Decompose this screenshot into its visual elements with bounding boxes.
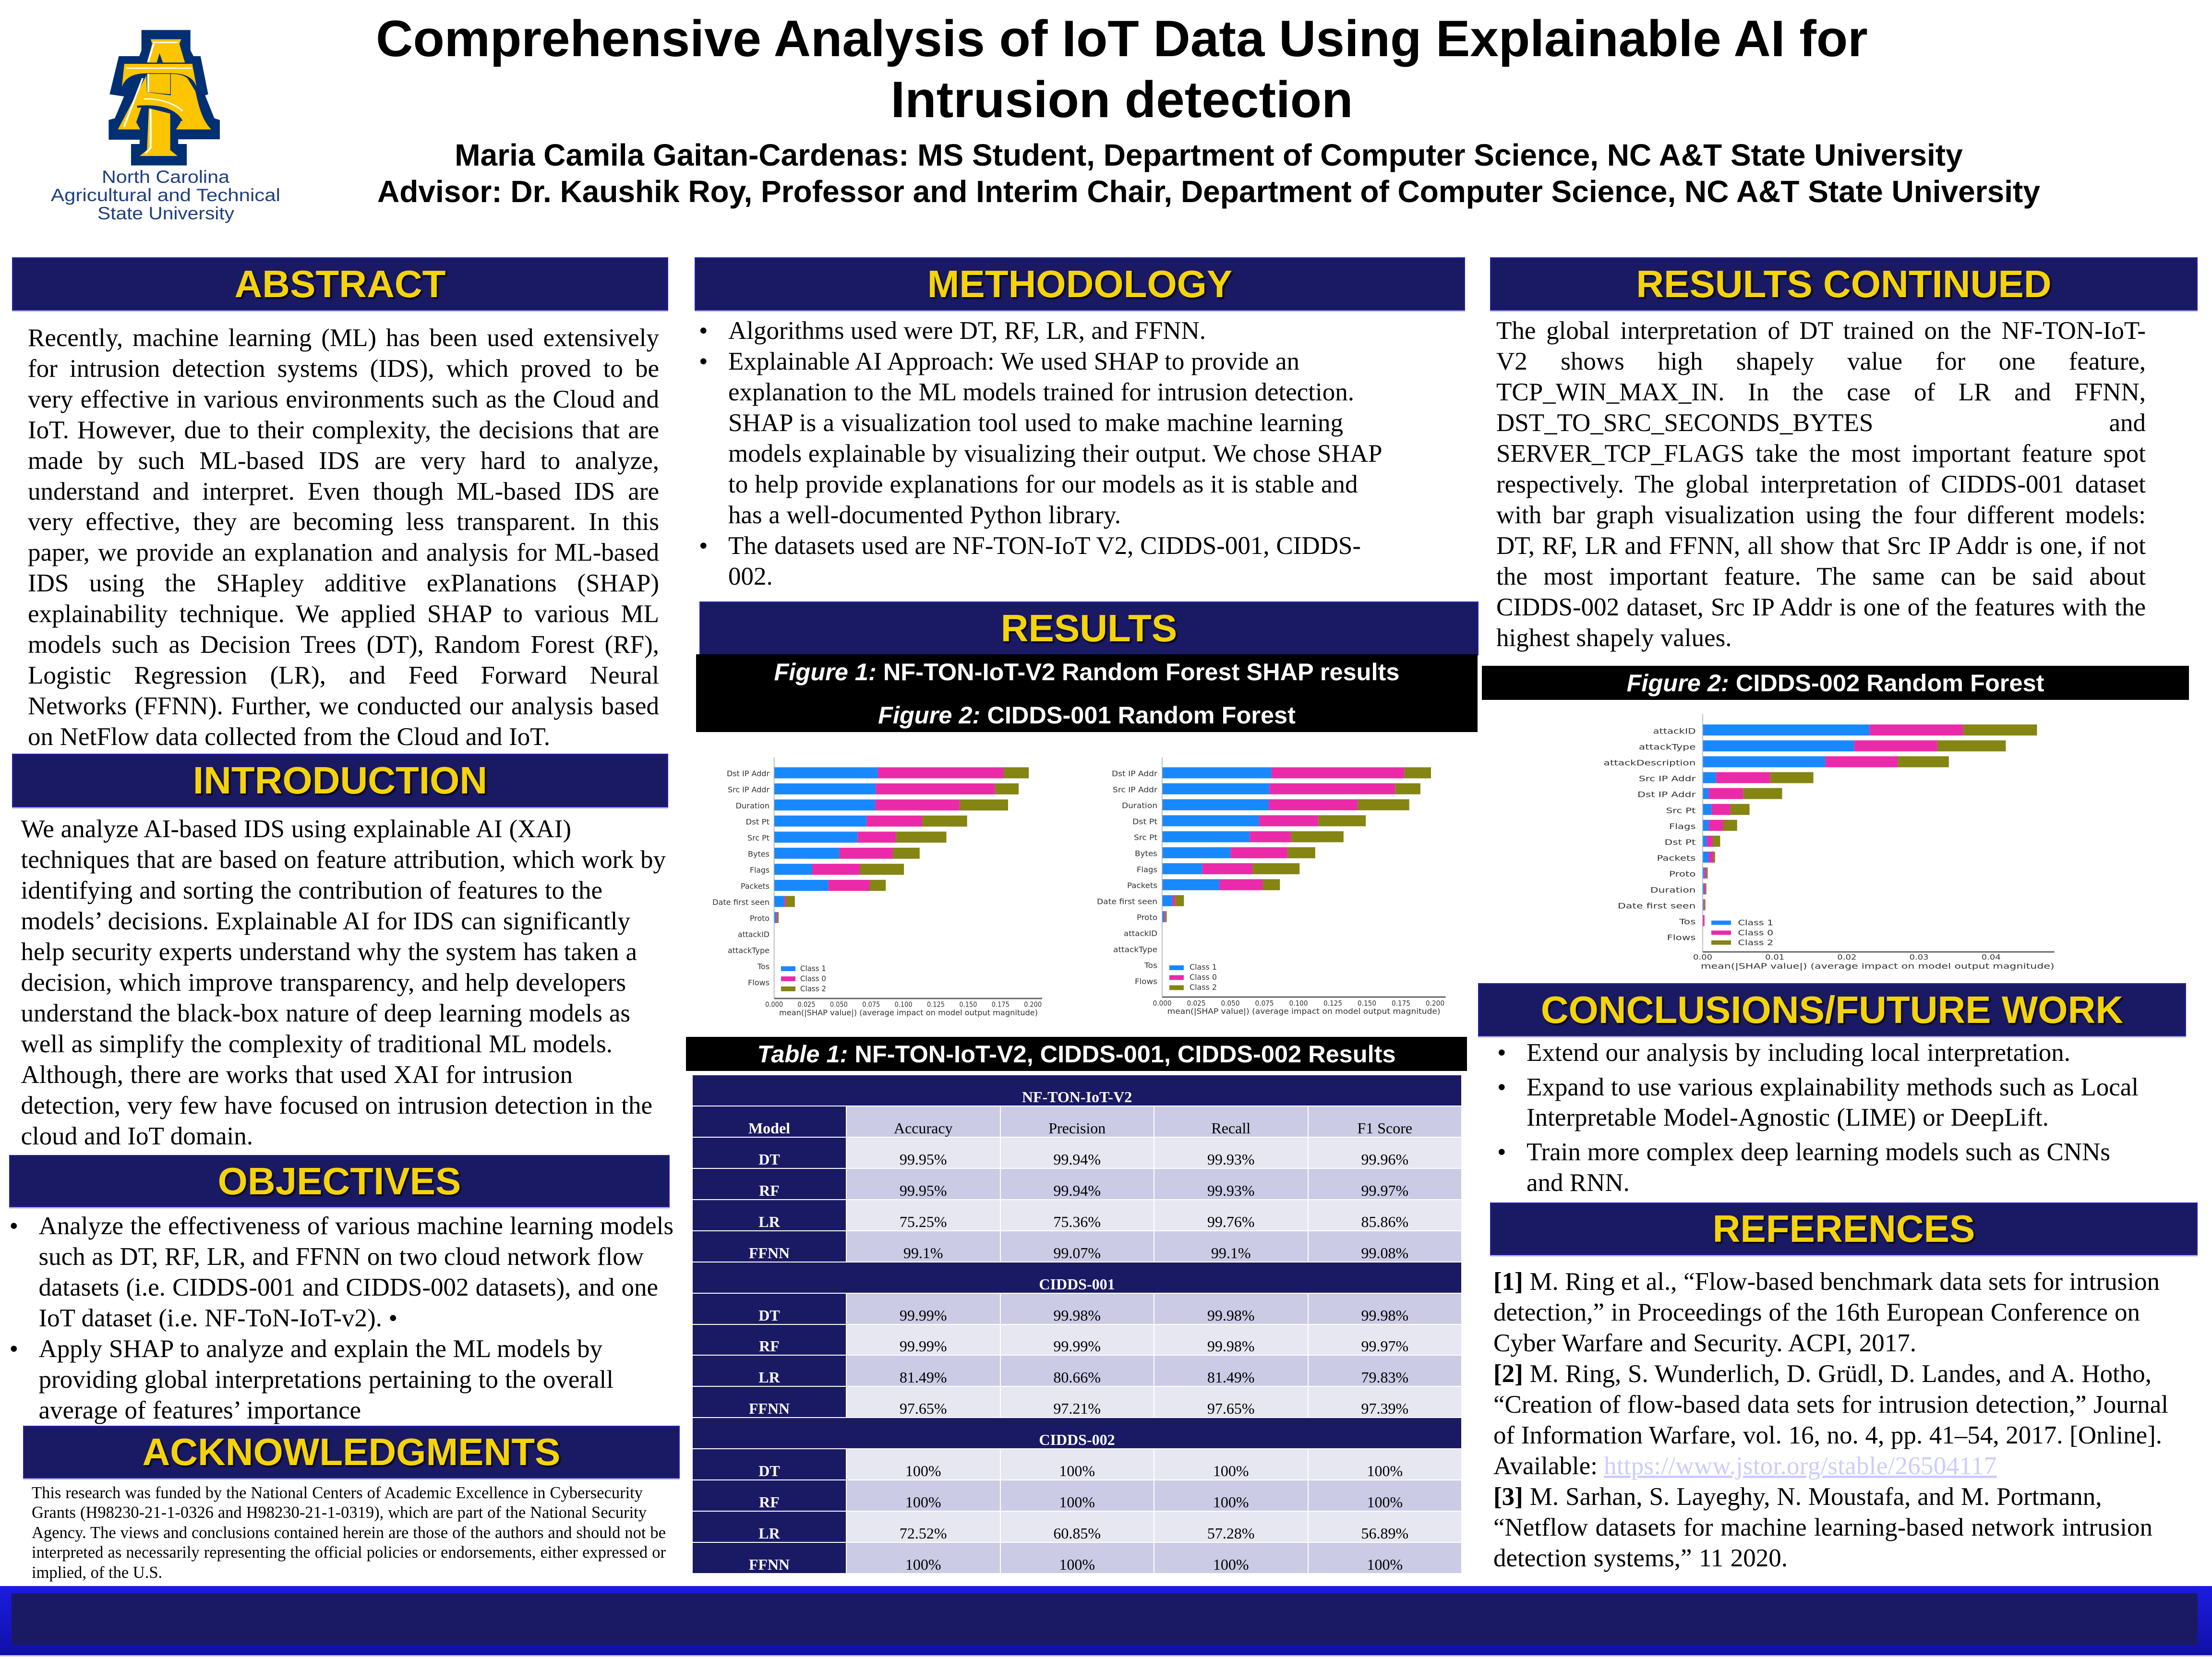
text: results continued: V2 shows high shapely value for one feature,: [1496, 348, 2146, 375]
text: methodology bullets: [699, 317, 1382, 590]
tick labels: 0.050: [1221, 999, 1239, 1008]
feature labels: Dst IP Addr: [727, 769, 769, 778]
heading: results continued: [1490, 257, 2198, 311]
table: model results: 100%: [1213, 1493, 1249, 1511]
feature labels: Bytes: [748, 850, 769, 858]
feature labels: Flags: [1669, 822, 1695, 831]
table: model results: 99.96%: [1361, 1151, 1408, 1168]
chart: figure 1 SHAP bar chart: [712, 757, 1042, 1017]
table: model results: 99.97%: [1361, 1182, 1408, 1199]
text: results continued: DST_TO_SRC_SECONDS_BYTES and: [1496, 409, 2146, 437]
tick labels: 0.200: [1426, 999, 1444, 1008]
table: model results: 100%: [905, 1493, 941, 1511]
tick labels: 0.025: [798, 1000, 815, 1009]
text: abstract: Logistic Regression (LR), and Feed Forward Neural: [28, 661, 659, 689]
table: model results: DT: [758, 1462, 780, 1479]
heading: abstract: ABSTRACT: [235, 263, 445, 305]
text: objectives bullets: datasets (i.e. CIDDS-001 and CIDDS-002 datasets), and one: [38, 1274, 658, 1301]
feature labels: attackID: [1124, 929, 1157, 938]
legend: Class 0: [1190, 973, 1217, 982]
table: model results: 100%: [1059, 1493, 1095, 1511]
text: •: [699, 317, 708, 345]
table: model results: DT: [758, 1151, 780, 1168]
footer inner panel: [12, 1593, 2198, 1645]
legend: Class 2: [800, 984, 826, 993]
text: references: Available: https://www.jstor.org/stable/26504117: [1493, 1452, 1997, 1480]
legend: Class 1: [1738, 918, 1773, 927]
caption bar: figures 1 and 2: Figure 2: CIDDS-001 Random Forest: [878, 701, 1296, 729]
bars: [774, 767, 1029, 923]
table: model results: 60.85%: [1053, 1525, 1101, 1542]
table: model results: RF: [759, 1337, 780, 1355]
text: abstract: models such as Decision Trees (DT), Random Forest (RF),: [28, 631, 659, 659]
icon: Aggie AT emblem: [108, 30, 220, 166]
feature labels: Src IP Addr: [1113, 785, 1157, 794]
text: methodology bullets: explanation to the ML models trained for intrusion detection.: [728, 378, 1354, 406]
table: model results: 81.49%: [900, 1369, 947, 1386]
feature labels: Src Pt: [1666, 806, 1695, 815]
feature labels: Packets: [1127, 881, 1157, 890]
table: model results: Accuracy: [894, 1119, 953, 1137]
text: references: detection,” in Proceedings of the 16th European Conference on: [1493, 1298, 2140, 1326]
table: model results: FFNN: [749, 1400, 790, 1417]
text: abstract: understand and interpret. Even though ML-based IDS are: [28, 478, 659, 505]
table: model results: 97.39%: [1361, 1400, 1408, 1417]
feature labels: Flags: [1137, 865, 1157, 874]
text: methodology bullets: 002.: [728, 563, 773, 590]
tick labels: 0.075: [862, 1000, 880, 1009]
text: conclusions bullets: •: [1497, 1039, 1506, 1067]
text: introduction: identifying and sorting the contribution of features to the: [21, 877, 602, 904]
feature labels: Src Pt: [747, 833, 769, 842]
text: objectives bullets: Analyze the effectiveness of various machine learning models: [38, 1212, 673, 1240]
feature labels: Tos: [1144, 961, 1157, 970]
text: conclusions bullets: Interpretable Model-Agnostic (LIME) or DeepLift.: [1527, 1104, 2049, 1131]
text: abstract: Recently, machine learning (ML) has been used extensively: [28, 324, 659, 352]
table: model results: LR: [758, 1369, 780, 1386]
legend: [781, 964, 826, 993]
logo wordmark: North Carolina: [102, 167, 229, 187]
text: introduction: Although, there are works that used XAI for intrusion: [21, 1061, 573, 1089]
table: model results: 99.98%: [1361, 1307, 1408, 1324]
feature labels: Tos: [1679, 917, 1695, 926]
text: introduction: cloud and IoT domain.: [21, 1122, 253, 1150]
feature labels: [1097, 769, 1157, 986]
heading: results continued: RESULTS CONTINUED: [1636, 263, 2052, 305]
text: introduction: understand the black-box nature of deep learning models as: [21, 999, 630, 1027]
text: results continued: the most important feature. The same can be said about: [1496, 563, 2146, 590]
text: objectives bullets: [10, 1212, 673, 1424]
tick labels: 0.000: [1153, 999, 1171, 1008]
text: references: [1] M. Ring et al., “Flow-based benchmark data sets for intrusion: [1493, 1268, 2160, 1296]
text: abstract: IoT. However, due to their complexity, the decisions that are: [28, 416, 659, 444]
legend: [1169, 962, 1217, 992]
text: abstract: Networks (FFNN). Further, we conducted our analysis based: [28, 692, 659, 720]
text: objectives bullets: average of features’ importance: [38, 1396, 361, 1424]
tick labels: [1153, 999, 1444, 1008]
text: conclusions bullets: Extend our analysis by including local interpretation.: [1527, 1039, 2070, 1067]
logo wordmark: Agricultural and Technical: [51, 185, 280, 205]
tick labels: 0.025: [1187, 999, 1206, 1008]
text: results continued: highest shapely values.: [1496, 624, 1732, 652]
axes: [1162, 757, 1163, 997]
text: results continued: DT, RF, LR and FFNN, all show that Src IP Addr is one, if not: [1496, 532, 2146, 560]
feature labels: Bytes: [1135, 849, 1157, 858]
table: model results: 99.94%: [1053, 1151, 1101, 1168]
tick labels: 0.175: [992, 1000, 1010, 1009]
table: model results: Recall: [1211, 1119, 1250, 1137]
table: model results: LR: [758, 1525, 780, 1542]
caption bar: figure 2 CIDDS-002: [1482, 665, 2189, 700]
text: abstract: made by such ML-based IDS are very hard to analyze,: [28, 447, 659, 475]
text: conclusions bullets: Train more complex deep learning models such as CNNs: [1527, 1138, 2110, 1166]
table: model results: 97.65%: [1207, 1400, 1255, 1417]
table: model results: 100%: [1367, 1462, 1403, 1479]
heading: objectives: OBJECTIVES: [218, 1160, 461, 1202]
legend: Class 1: [1190, 962, 1217, 972]
legend: Class 0: [800, 974, 826, 983]
text: references: detection systems,” 11 2020.: [1493, 1544, 1788, 1572]
text: abstract: very effective, they are becoming less transparent. In this: [28, 508, 659, 536]
feature labels: Packets: [741, 881, 769, 891]
tick labels: 0.00: [1693, 953, 1712, 962]
text: introduction: We analyze AI-based IDS using explainable AI (XAI): [21, 815, 571, 843]
table: model results: 75.25%: [900, 1213, 947, 1230]
feature labels: Dst IP Addr: [1112, 769, 1157, 778]
text: methodology bullets: has a well-documented Python library.: [728, 501, 1121, 529]
text: references: “Creation of flow-based data sets for intrusion detection,” Journal: [1493, 1391, 2168, 1419]
tick labels: 0.100: [895, 1000, 913, 1009]
caption bar: figures 1 and 2: Figure 1: NF-TON-IoT-V2 Random Forest SHAP results: [774, 658, 1399, 685]
text: results continued: TCP_WIN_MAX_IN. In the case of LR and FFNN,: [1496, 378, 2146, 406]
legend: Class 1: [800, 964, 826, 973]
table: model results: 99.1%: [1211, 1244, 1251, 1262]
legend: Class 2: [1190, 983, 1217, 992]
feature labels: [712, 769, 769, 987]
text: introduction: detection, very few have focused on intrusion detection in the: [21, 1092, 652, 1119]
tick labels: [1693, 953, 2001, 962]
text: introduction: models’ decisions. Explainable AI for IDS can significantly: [21, 907, 630, 935]
caption bar: figures 1 and 2: [696, 654, 1478, 732]
text: references: [2] M. Ring, S. Wunderlich, D. Grüdl, D. Landes, and A. Hotho,: [1493, 1360, 2152, 1388]
text: references: “Netflow datasets for machine learning-based network intrusion: [1493, 1514, 2152, 1541]
table: model results: 99.99%: [1053, 1337, 1101, 1355]
text: acknowledgments: interpreted as necessarily representing the official policies or endorsements, either expressed or: [32, 1543, 666, 1562]
text: acknowledgments: This research was funded by the National Centers of Academic Excellence in Cybersecurity: [32, 1484, 643, 1502]
feature labels: Dst Pt: [1132, 817, 1157, 826]
heading: methodology: [695, 257, 1465, 311]
tick labels: 0.04: [1982, 953, 2001, 962]
tick labels: 0.150: [1358, 999, 1376, 1008]
table: model results: 99.94%: [1053, 1182, 1101, 1199]
text: references: Cyber Warfare and Security. ACPI, 2017.: [1493, 1329, 1916, 1357]
feature labels: Flags: [750, 866, 769, 875]
axes: [1702, 714, 1703, 952]
tick labels: 0.150: [959, 1000, 977, 1009]
legend: Class 2: [1738, 938, 1773, 947]
feature labels: Proto: [750, 914, 769, 923]
bars: [1703, 724, 2037, 926]
feature labels: Dst Pt: [746, 817, 769, 827]
table: model results: 99.98%: [1207, 1307, 1255, 1324]
table: model results: 99.1%: [903, 1244, 943, 1262]
feature labels: [1603, 726, 1696, 942]
heading: results: RESULTS: [1001, 607, 1177, 649]
heading: abstract: [12, 257, 668, 311]
heading: references: REFERENCES: [1713, 1207, 1975, 1250]
table: model results: 99.99%: [900, 1307, 947, 1324]
heading: methodology: METHODOLOGY: [927, 263, 1232, 305]
table: model results: FFNN: [749, 1244, 790, 1262]
authors: [377, 138, 2040, 209]
table: model results: LR: [758, 1213, 780, 1230]
title: Intrusion detection: [891, 71, 1353, 128]
chart: figure 2 SHAP bar chart: [1097, 757, 1446, 1016]
tick labels: 0.01: [1765, 953, 1784, 962]
tick labels: 0.02: [1837, 953, 1856, 962]
heading: conclusions/future work: [1478, 983, 2186, 1036]
text: methodology bullets: The datasets used are NF-TON-IoT V2, CIDDS-001, CIDDS-: [728, 532, 1361, 560]
text: •: [10, 1335, 18, 1363]
table: model results: [693, 1075, 1461, 1573]
tick labels: [765, 1000, 1042, 1009]
tick labels: 0.000: [765, 1000, 783, 1009]
axis title: mean(|SHAP value|) (average impact on model output magnitude): [1167, 1007, 1441, 1016]
table: model results: Model: [748, 1119, 790, 1137]
feature labels: Flows: [1667, 933, 1695, 942]
feature labels: Duration: [1650, 885, 1695, 894]
caption bar: figure 2 CIDDS-002: Figure 2: CIDDS-002 Random Forest: [1627, 669, 2044, 696]
heading: conclusions/future work: CONCLUSIONS/FUTURE WORK: [1541, 988, 2123, 1031]
feature labels: Packets: [1657, 854, 1695, 863]
text: abstract: [28, 324, 659, 751]
text: methodology bullets: models explainable by visualizing their output. We chose SHAP: [728, 440, 1382, 468]
table: model results: 99.98%: [1053, 1307, 1101, 1324]
text: conclusions bullets: Expand to use various explainability methods such as Local: [1527, 1073, 2139, 1101]
table: model results: 99.99%: [900, 1337, 947, 1355]
title: [376, 10, 1868, 128]
text: results continued: SERVER_TCP_FLAGS take the most important feature spot: [1496, 440, 2146, 468]
feature labels: attackID: [738, 930, 769, 939]
table: model results: 99.97%: [1361, 1337, 1408, 1355]
table: model results: RF: [759, 1182, 780, 1199]
text: •: [10, 1212, 18, 1240]
text: results continued: The global interpretation of DT trained on the NF-TON-IoT-: [1496, 317, 2146, 345]
feature labels: Date first seen: [1618, 901, 1695, 910]
logo: North Carolina A&T State University: [51, 30, 280, 223]
table: model results: CIDDS-002: [1039, 1431, 1115, 1448]
feature labels: attackType: [1113, 945, 1157, 954]
text: methodology bullets: Explainable AI Approach: We used SHAP to provide an: [728, 348, 1299, 375]
heading: results: [699, 601, 1479, 655]
caption bar: table 1: Table 1: NF-TON-IoT-V2, CIDDS-001, CIDDS-002 Results: [757, 1040, 1396, 1068]
text: references: of Information Warfare, vol. 16, no. 4, pp. 41–54, 2017. [Online].: [1493, 1421, 2162, 1449]
tick labels: 0.075: [1255, 999, 1274, 1008]
table: model results: 100%: [905, 1556, 941, 1573]
heading: introduction: INTRODUCTION: [193, 759, 487, 802]
table: model results: 75.36%: [1053, 1213, 1101, 1230]
feature labels: Flows: [748, 978, 769, 987]
text: results continued: with bar graph visualization using the four different models:: [1496, 501, 2146, 529]
table: model results: 97.21%: [1053, 1400, 1101, 1417]
table: model results: DT: [758, 1307, 780, 1324]
tick labels: 0.175: [1392, 999, 1410, 1008]
table: model results: RF: [759, 1493, 780, 1511]
table: model results: 57.28%: [1207, 1525, 1255, 1542]
table: model results: 81.49%: [1207, 1369, 1255, 1386]
authors: Advisor: Dr. Kaushik Roy, Professor and Interim Chair, Department of Computer Science, NC A&T State University: [377, 174, 2040, 209]
feature labels: attackID: [1653, 726, 1695, 735]
tick labels: 0.03: [1910, 953, 1929, 962]
table: model results: FFNN: [749, 1556, 790, 1573]
text: results continued: [1496, 317, 2146, 652]
text: references: [1493, 1268, 2168, 1572]
title: Comprehensive Analysis of IoT Data Using Explainable AI for: [376, 10, 1868, 67]
table: model results: 100%: [1213, 1462, 1249, 1479]
text: results continued: respectively. The global interpretation of CIDDS-001 dataset: [1496, 470, 2146, 498]
table: model results: F1 Score: [1357, 1119, 1412, 1137]
text: methodology bullets: SHAP is a visualization tool used to make machine learning: [728, 409, 1343, 437]
feature labels: attackType: [728, 946, 769, 955]
text: introduction: well as simplify the complexity of traditional ML models.: [21, 1030, 613, 1058]
feature labels: attackType: [1639, 742, 1695, 751]
table: model results: 100%: [905, 1462, 941, 1479]
text: abstract: paper, we provide an explanation and analysis for ML-based: [28, 539, 659, 566]
text: acknowledgments: [32, 1484, 666, 1582]
footer band: [0, 1586, 2212, 1655]
text: results continued: CIDDS-002 dataset, Src IP Addr is one of the features with the: [1496, 593, 2146, 621]
tick labels: 0.050: [830, 1000, 848, 1009]
feature labels: Date first seen: [712, 898, 769, 907]
text: •: [699, 348, 708, 375]
text: introduction: decision, which improve transparency, and help developers: [21, 969, 626, 997]
text: introduction: techniques that are based on feature attribution, which work by: [21, 846, 666, 874]
table: model results: 100%: [1367, 1493, 1403, 1511]
text: acknowledgments: Agency. The views and conclusions contained herein are those of the authors and should not be: [32, 1524, 666, 1542]
table: model results: CIDDS-001: [1039, 1275, 1115, 1293]
caption bar: table 1: [686, 1037, 1467, 1071]
heading: acknowledgments: ACKNOWLEDGMENTS: [142, 1431, 561, 1473]
table: model results: NF-TON-IoT-V2: [1022, 1088, 1132, 1106]
tick labels: 0.100: [1289, 999, 1308, 1008]
feature labels: Src IP Addr: [728, 785, 769, 794]
text: abstract: explainability technique. We applied SHAP to various ML: [28, 600, 659, 628]
feature labels: Duration: [1122, 801, 1157, 810]
text: conclusions bullets: •: [1497, 1073, 1506, 1101]
axis title: mean(|SHAP value|) (average impact on model output magnitude): [1701, 962, 2055, 971]
tick labels: 0.125: [927, 1000, 945, 1009]
feature labels: attackDescription: [1603, 758, 1695, 767]
text: abstract: very effective in various environments such as the Cloud and: [28, 385, 659, 413]
table: model results: 85.86%: [1361, 1213, 1408, 1230]
axis title: mean(|SHAP value|) (average impact on model output magnitude): [779, 1008, 1038, 1017]
text: conclusions bullets: and RNN.: [1527, 1168, 1630, 1196]
table: model results: 99.93%: [1207, 1151, 1255, 1168]
table: model results: 99.76%: [1207, 1213, 1255, 1230]
text: abstract: on NetFlow data collected from the Cloud and IoT.: [28, 723, 550, 751]
chart: CIDDS-002 SHAP bar chart: [1603, 714, 2055, 971]
feature labels: Proto: [1669, 869, 1695, 878]
heading: acknowledgments: [23, 1426, 680, 1479]
axes: [774, 757, 775, 998]
table: model results: 99.95%: [900, 1151, 947, 1168]
heading: objectives: [9, 1155, 670, 1207]
text: abstract: IDS using the SHapley additive exPlanations (SHAP): [28, 569, 659, 597]
text: conclusions bullets: •: [1497, 1138, 1506, 1166]
feature labels: Dst IP Addr: [1637, 790, 1696, 799]
legend: [1711, 918, 1773, 947]
legend: Class 0: [1738, 928, 1773, 937]
table: model results: 99.07%: [1053, 1244, 1101, 1262]
text: introduction: [21, 815, 666, 1150]
text: acknowledgments: implied, of the U.S.: [32, 1563, 162, 1582]
table: model results: 100%: [1213, 1556, 1249, 1573]
text: conclusions bullets: [1497, 1039, 2139, 1196]
table: model results: 100%: [1059, 1462, 1095, 1479]
text: objectives bullets: IoT dataset (i.e. NF-ToN-IoT-v2). •: [38, 1304, 397, 1332]
table: model results: 99.08%: [1361, 1244, 1408, 1262]
text: methodology bullets: Algorithms used were DT, RF, LR, and FFNN.: [728, 317, 1206, 345]
text: objectives bullets: providing global interpretations pertaining to the overall: [38, 1366, 613, 1394]
bars: [1162, 767, 1431, 922]
feature labels: Date first seen: [1097, 897, 1157, 906]
feature labels: Src Pt: [1134, 833, 1157, 842]
logo wordmark: State University: [97, 204, 235, 223]
table: model results: 72.52%: [900, 1525, 947, 1542]
table: model results: 56.89%: [1361, 1525, 1408, 1542]
text: •: [699, 532, 708, 560]
feature labels: Proto: [1137, 913, 1157, 922]
table: model results: 80.66%: [1053, 1369, 1101, 1386]
feature labels: Src IP Addr: [1639, 774, 1696, 783]
table: model results: 99.95%: [900, 1182, 947, 1199]
text: methodology bullets: to help provide explanations for our models as it is stable and: [728, 470, 1358, 498]
text: references: [3] M. Sarhan, S. Layeghy, N. Moustafa, and M. Portmann,: [1493, 1483, 2102, 1511]
feature labels: Tos: [757, 962, 769, 971]
feature labels: Flows: [1135, 977, 1157, 986]
heading: references: [1490, 1202, 2198, 1255]
table: model results: 100%: [1059, 1556, 1095, 1573]
authors: Maria Camila Gaitan-Cardenas: MS Student, Department of Computer Science, NC A&T State University: [455, 138, 1963, 172]
table: model results: 79.83%: [1361, 1369, 1408, 1386]
tick labels: 0.125: [1323, 999, 1342, 1008]
table: model results: 100%: [1367, 1556, 1403, 1573]
heading: introduction: [12, 754, 668, 807]
table: model results: 97.65%: [900, 1400, 947, 1417]
feature labels: Dst Pt: [1665, 838, 1695, 847]
table: model results: Precision: [1048, 1119, 1106, 1137]
text: acknowledgments: Grants (H98230-21-1-0326 and H98230-21-1-0319), which are part of the National Security: [32, 1503, 647, 1522]
logo wordmark: [51, 167, 280, 223]
table: model results: 99.93%: [1207, 1182, 1255, 1199]
text: objectives bullets: Apply SHAP to analyze and explain the ML models by: [38, 1335, 602, 1363]
text: abstract: for intrusion detection systems (IDS), which proved to be: [28, 355, 659, 383]
text: objectives bullets: such as DT, RF, LR, and FFNN on two cloud network flow: [38, 1243, 644, 1271]
feature labels: Duration: [735, 801, 769, 810]
table: model results: 99.98%: [1207, 1337, 1255, 1355]
text: introduction: help security experts understand why the system has taken a: [21, 938, 637, 966]
tick labels: 0.200: [1024, 1000, 1042, 1009]
